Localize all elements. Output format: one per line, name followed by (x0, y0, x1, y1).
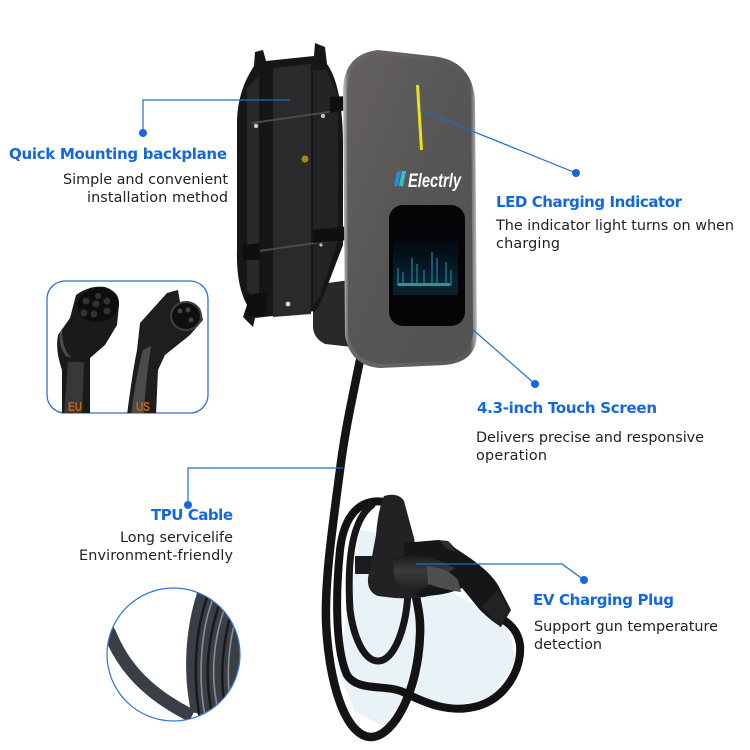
text: touch screen: 4.3-inch Touch Screen (477, 399, 657, 417)
cable: inner loop (349, 505, 408, 661)
text: touch screen (476, 399, 704, 464)
label US: US (136, 399, 150, 414)
text: LED indicator: charging (496, 236, 560, 252)
text: TPU cable (79, 506, 233, 564)
text: touch screen: operation (476, 448, 547, 464)
LED light bar (416, 85, 423, 150)
text: quick mounting backplane: Quick Mounting backplane (9, 145, 227, 163)
panel: charger body (343, 50, 477, 368)
text: TPU cable: TPU Cable (151, 506, 233, 524)
rod (355, 556, 375, 574)
text: EV plug: Support gun temperature (534, 619, 718, 635)
text: TPU cable: Environment-friendly (79, 548, 233, 564)
text: LED indicator: The indicator light turns on when (495, 218, 734, 234)
yellow dot (302, 156, 308, 162)
charging cable and loops (326, 360, 520, 737)
text: EV plug: EV Charging Plug (533, 591, 674, 609)
text: EV plug: detection (534, 637, 602, 653)
text: touch screen: Delivers precise and responsive (476, 430, 704, 446)
logo (394, 171, 462, 192)
EU connector (57, 285, 122, 415)
panel: wall box behind charger (313, 280, 352, 347)
text: quick mounting backplane: installation method (87, 190, 228, 206)
text: quick mounting backplane (9, 145, 228, 206)
panel: cable close-up circle (106, 587, 241, 722)
leader: touch screen (471, 328, 539, 388)
leader: TPU cable (184, 468, 343, 509)
text: LED indicator: LED Charging Indicator (496, 193, 683, 211)
logo: Electrly (408, 171, 462, 192)
panel: connector types (47, 281, 208, 415)
leader: LED indicator (420, 110, 580, 177)
text: LED indicator (495, 193, 734, 252)
screws (254, 124, 258, 128)
text: TPU cable: Long servicelife (120, 530, 233, 546)
leader: EV plug (416, 564, 588, 584)
leader: quick mounting (139, 100, 290, 137)
US connector (127, 290, 203, 415)
text: EV plug (533, 591, 718, 653)
cable: outer loop to plug (337, 501, 520, 709)
icon: charging plug (393, 540, 511, 627)
text: quick mounting backplane: Simple and convenient (63, 172, 228, 188)
icon: cable holder (368, 495, 445, 598)
cable: main run from charger (326, 360, 420, 737)
label EU: EU (68, 399, 82, 414)
panel: quick mounting backplane (237, 43, 350, 327)
touch screen (389, 205, 465, 326)
light panel visible through the cable loops (338, 530, 517, 727)
